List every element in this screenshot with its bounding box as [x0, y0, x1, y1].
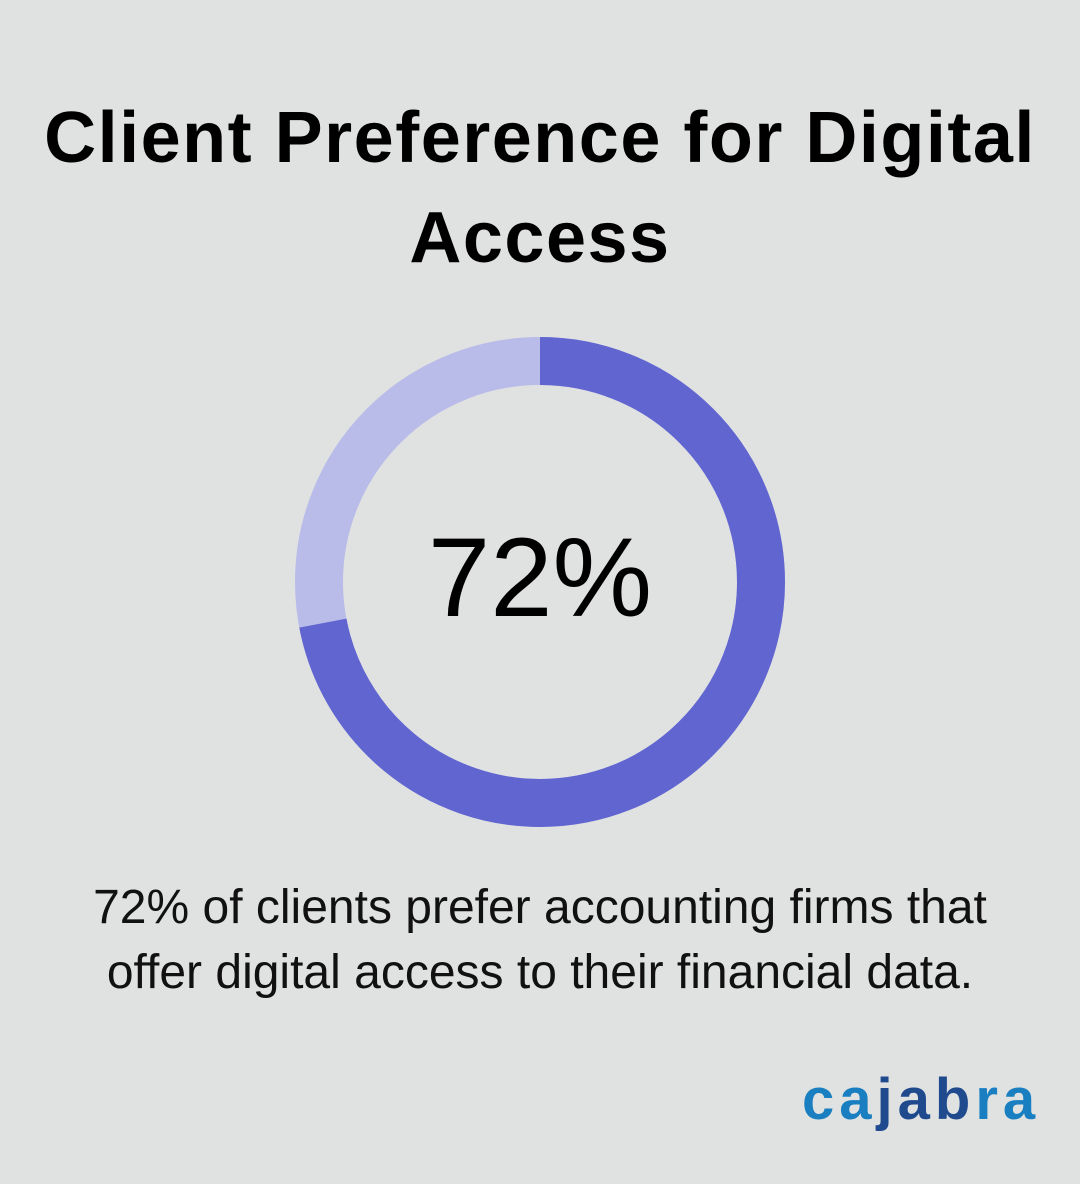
- title: [44, 98, 1036, 278]
- donut chart: 72%: [428, 515, 652, 640]
- description: offer digital access to their financial data.: [107, 946, 973, 999]
- description: 72% of clients prefer accounting firms that: [93, 881, 987, 934]
- title: Access: [409, 198, 671, 278]
- logo: cajabra: [802, 1067, 1040, 1132]
- title: Client Preference for Digital: [44, 98, 1036, 178]
- description: [93, 881, 987, 999]
